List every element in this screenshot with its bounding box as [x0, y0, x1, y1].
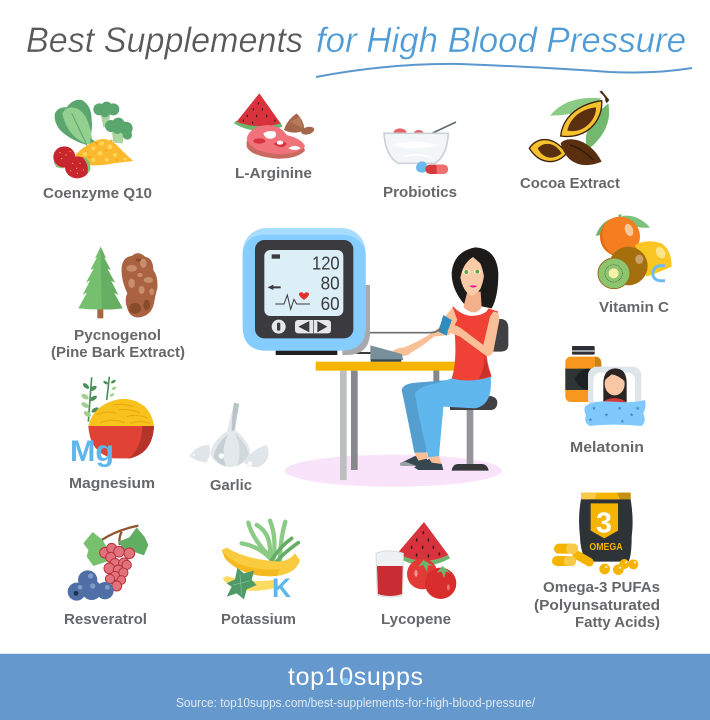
- icon: supplement bottle and sleeping woman: ★: [592, 406, 597, 412]
- title: Best Supplements: [26, 21, 303, 60]
- label: Vitamin C: [599, 300, 670, 316]
- icon: grapes and blueberries: [68, 526, 148, 601]
- label: Pycnogenol: [74, 328, 161, 344]
- panel: Probiotics: [383, 122, 457, 201]
- monitor readings: 80: [321, 272, 340, 293]
- icon: bananas, greens and mint: [222, 521, 300, 599]
- panel: Omega-3 PUFAs: [534, 493, 660, 631]
- label: Melatonin: [570, 440, 644, 456]
- label: Omega-3 PUFAs: [543, 580, 660, 596]
- monitor readings: 60: [321, 293, 340, 314]
- monitor readings: [312, 252, 340, 314]
- label: Garlic: [210, 478, 252, 494]
- panel: Vitamin C: [596, 214, 672, 316]
- icon: supplement bottle and sleeping woman: [565, 346, 646, 426]
- panel: Magnesium: [69, 377, 155, 492]
- panel: central blood pressure scene: [243, 228, 508, 487]
- icon: supplement bottle and sleeping woman: ★: [620, 419, 625, 425]
- label: Probiotics: [383, 185, 457, 201]
- floor ellipse: [285, 455, 502, 487]
- label: L-Arginine: [235, 166, 312, 182]
- chair: [437, 319, 508, 471]
- icon: supplement bottle and sleeping woman: ★: [635, 406, 640, 412]
- woman: [392, 247, 499, 470]
- logo: top10supps: [288, 663, 423, 691]
- icon: pine tree and bark: [78, 247, 157, 318]
- K symbol: K: [272, 573, 291, 603]
- label: Cocoa Extract: [520, 176, 620, 192]
- label: Resveratrol: [64, 612, 147, 628]
- icon: yogurt bowl and capsule: [384, 122, 456, 174]
- label line three: Fatty Acids): [575, 615, 660, 631]
- icon: juice glass, watermelon, tomatoes: [376, 522, 456, 599]
- label: Magnesium: [69, 476, 155, 492]
- footer band: [0, 653, 710, 720]
- panel: Lycopene: [376, 522, 456, 628]
- blood pressure monitor: [243, 228, 370, 355]
- label line two: (Polyunsaturated: [534, 598, 660, 614]
- icon: omega-3 pack and softgels: [552, 493, 638, 575]
- icon: omega-3 pack and softgels: OMEGA: [589, 542, 623, 553]
- icon: supplement bottle and sleeping woman: ★: [617, 406, 622, 412]
- icon: garlic bulb and cloves: [189, 403, 269, 467]
- panel: L-Arginine: [234, 93, 315, 182]
- icon: omega-3 pack and softgels: 3: [596, 507, 612, 539]
- label: Lycopene: [381, 612, 451, 628]
- source line: Source: top10supps.com/best-supplements-for-high-blood-pressure/: [176, 696, 535, 710]
- icon: supplement bottle and sleeping woman: ★: [629, 413, 634, 419]
- panel: Potassium: [221, 521, 300, 628]
- panel: Pycnogenol: [51, 247, 185, 361]
- panel: Resveratrol: [64, 526, 148, 628]
- cuff cable and pump: [355, 328, 441, 362]
- desk: [316, 362, 477, 480]
- icon: watermelon, steak and almonds: [234, 93, 315, 159]
- panel: Cocoa Extract: [520, 91, 620, 192]
- panel: Melatonin: [565, 346, 646, 456]
- label: Potassium: [221, 612, 296, 628]
- Mg symbol: Mg: [70, 435, 114, 468]
- icon: leafy greens, corn and strawberries: [53, 100, 133, 178]
- monitor readings: 120: [312, 252, 340, 273]
- panel: Coenzyme Q10: [43, 100, 152, 202]
- icon: cocoa pods and leaves: [529, 91, 609, 165]
- panel: Garlic: [189, 403, 269, 494]
- label: Coenzyme Q10: [43, 186, 152, 202]
- icon: grain bowl with herbs: [80, 377, 154, 459]
- icon: citrus and kiwi fruit: [596, 214, 672, 289]
- title: [26, 21, 692, 77]
- label line two: (Pine Bark Extract): [51, 345, 185, 361]
- title: for High Blood Pressure: [316, 21, 686, 60]
- icon: supplement bottle and sleeping woman: ★: [588, 417, 593, 423]
- icon: supplement bottle and sleeping woman: ★: [604, 412, 609, 418]
